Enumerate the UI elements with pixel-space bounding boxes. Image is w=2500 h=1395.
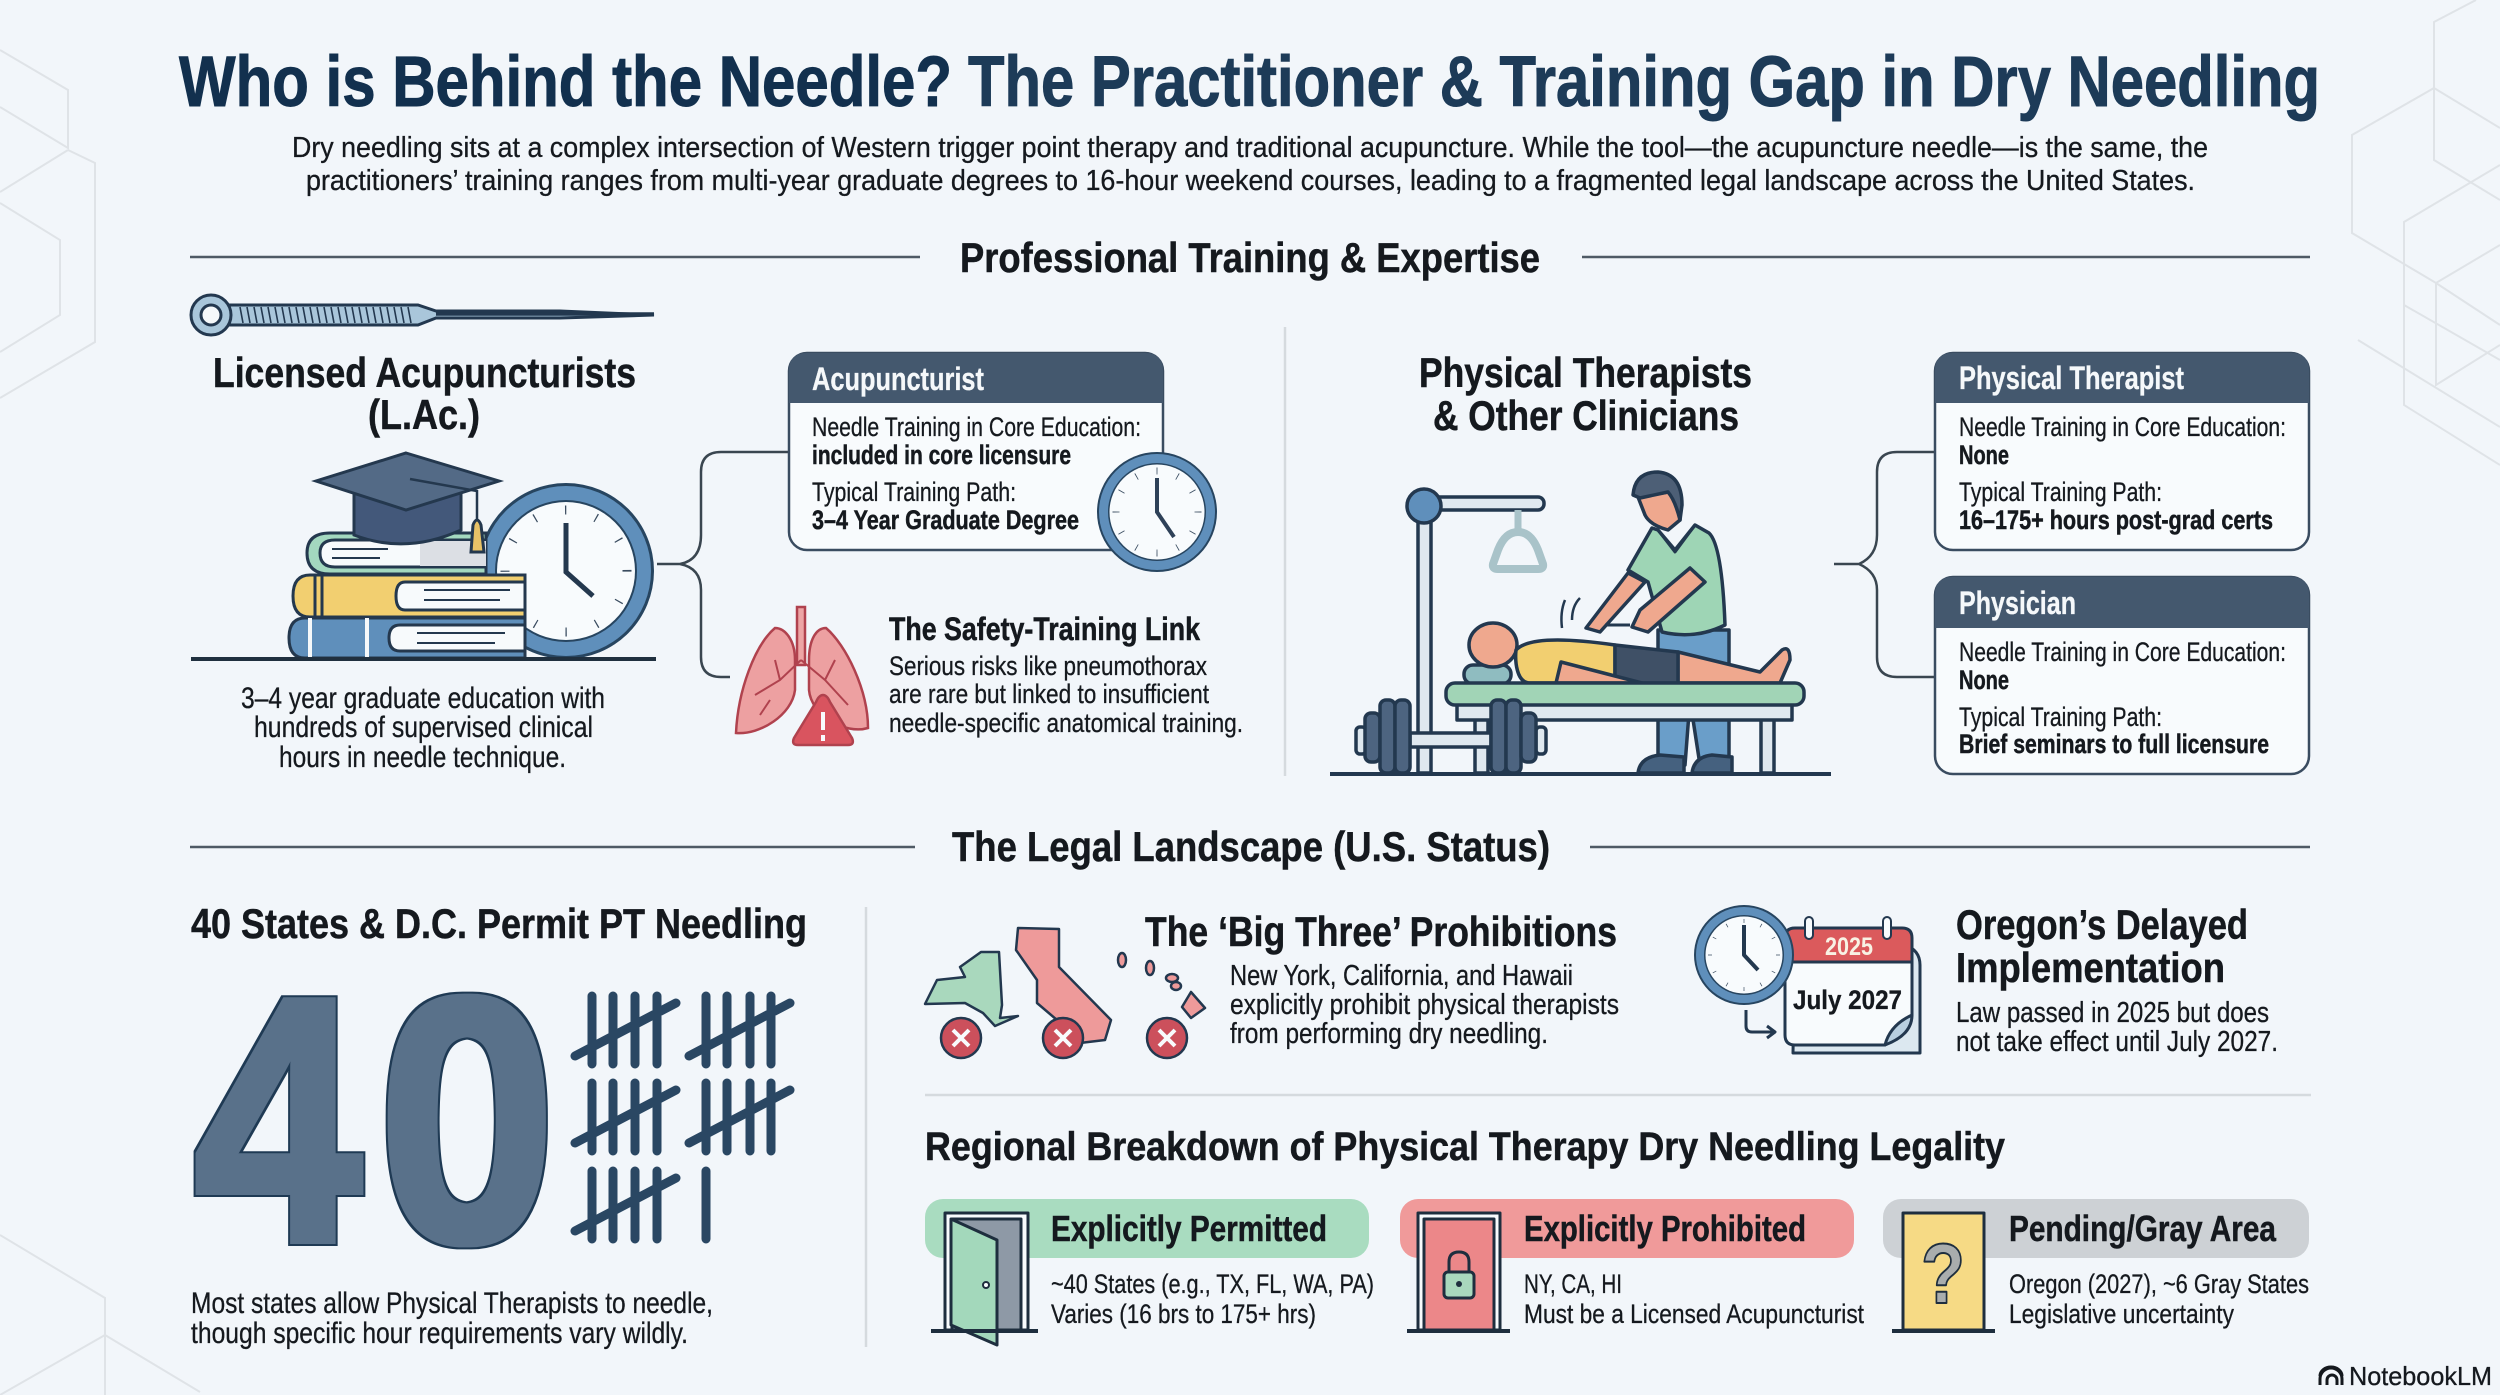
panel: explicitly permitted: Varies (16 brs to 175+ hrs) bbox=[1051, 1299, 1316, 1329]
card: physician: Typical Training Path: bbox=[1959, 702, 2162, 732]
big three text: The ‘Big Three’ Prohibitions bbox=[1145, 908, 1617, 955]
card: acupuncturist: included in core licensure bbox=[812, 440, 1071, 470]
icon: calendar and clock: 2025 bbox=[1825, 933, 1873, 961]
icon: locked door bbox=[1407, 1213, 1510, 1331]
panel: explicitly permitted bbox=[925, 1199, 1374, 1345]
intro text: practitioners’ training ranges from multi-year graduate degrees to 16-hour weekend courses, leading to a fragmented legal landscape across the United States. bbox=[306, 165, 2195, 197]
intro text: Dry needling sits at a complex intersection of Western trigger point therapy and traditional acupuncture. While the tool—the acupuncture needle—is the same, the bbox=[292, 132, 2208, 164]
card: physical therapist: Physical Therapist bbox=[1959, 360, 2184, 396]
card: acupuncturist: 3–4 Year Graduate Degree bbox=[812, 505, 1079, 535]
safety-training text bbox=[889, 611, 1243, 738]
card: physical therapist: 16–175+ hours post-grad certs bbox=[1959, 505, 2273, 535]
card: acupuncturist: Typical Training Path: bbox=[812, 477, 1016, 507]
card: physician: Brief seminars to full licensure bbox=[1959, 729, 2269, 759]
patient bbox=[1464, 623, 1790, 684]
card: physician: Needle Training in Core Education: bbox=[1959, 637, 2286, 667]
card: physical therapist bbox=[1935, 353, 2309, 550]
panel: explicitly permitted: ~40 States (e.g., TX, FL, WA, PA) bbox=[1051, 1269, 1374, 1299]
icon: acupuncture needle bbox=[191, 295, 654, 335]
caption: acupuncturist education: hours in needle technique. bbox=[279, 741, 566, 774]
caption: acupuncturist education: 3–4 year graduate education with bbox=[241, 682, 605, 715]
title: Who is Behind the Needle? bbox=[179, 43, 952, 122]
icon: lungs with warning bbox=[736, 607, 868, 745]
icon: small clock bbox=[1097, 452, 1217, 572]
dumbbell bbox=[1356, 700, 1546, 773]
title bbox=[179, 43, 2320, 122]
panel: explicitly prohibited bbox=[1400, 1199, 1864, 1331]
heading: licensed acupuncturists: Licensed Acupuncturists bbox=[213, 349, 636, 396]
green book bbox=[307, 533, 486, 574]
heading: licensed acupuncturists bbox=[213, 349, 636, 438]
safety-training text: Serious risks like pneumothorax bbox=[889, 651, 1207, 681]
yellow book bbox=[293, 575, 525, 617]
heading: licensed acupuncturists: (L.Ac.) bbox=[368, 391, 480, 438]
connector: acupuncturist branch bbox=[657, 452, 789, 677]
big three text: New York, California, and Hawaii bbox=[1230, 960, 1573, 992]
icon: state maps with prohibition marks bbox=[925, 928, 1205, 1058]
card: physical therapist: Needle Training in Core Education: bbox=[1959, 412, 2286, 442]
big three text bbox=[1145, 908, 1619, 1050]
icon: clock with books and graduation cap bbox=[191, 453, 656, 659]
icon: open door bbox=[931, 1213, 1038, 1345]
heading: physical therapists: Physical Therapists bbox=[1419, 349, 1752, 396]
card: physical therapist: Typical Training Path: bbox=[1959, 477, 2162, 507]
safety-training text: needle-specific anatomical training. bbox=[889, 708, 1243, 738]
caption: most states: Most states allow Physical Therapists to needle, bbox=[191, 1287, 713, 1320]
heading: legal landscape: The Legal Landscape (U.S. Status) bbox=[952, 823, 1550, 870]
big three text: from performing dry needling. bbox=[1230, 1018, 1548, 1050]
heading: physical therapists bbox=[1419, 349, 1752, 439]
caption: acupuncturist education: hundreds of supervised clinical bbox=[254, 711, 593, 744]
pole and handle bbox=[1407, 489, 1544, 773]
big number 40: 4 bbox=[194, 925, 364, 1316]
card: acupuncturist bbox=[789, 353, 1163, 550]
card: acupuncturist: Needle Training in Core Education: bbox=[812, 412, 1141, 442]
icon: calendar and clock bbox=[1694, 905, 1920, 1053]
caption: acupuncturist education bbox=[241, 682, 605, 774]
card: physician: Physician bbox=[1959, 585, 2076, 621]
graduation cap bbox=[316, 453, 499, 552]
therapist bbox=[1561, 472, 1732, 773]
panel: explicitly prohibited: NY, CA, HI bbox=[1524, 1269, 1622, 1299]
heading: 40 states: 40 States & D.C. Permit PT Needling bbox=[191, 900, 807, 947]
card: physician: None bbox=[1959, 665, 2009, 695]
icon: question door bbox=[1892, 1213, 1995, 1331]
tally marks bbox=[575, 996, 790, 1239]
illustration: therapist treating patient bbox=[1330, 472, 1831, 774]
big three text: explicitly prohibit physical therapists bbox=[1230, 989, 1619, 1021]
safety-training text: The Safety-Training Link bbox=[889, 611, 1200, 647]
icon: question door: ? bbox=[1921, 1227, 1965, 1322]
big number 40: 0 bbox=[378, 925, 556, 1316]
heading: professional training: Professional Training & Expertise bbox=[960, 234, 1540, 281]
table bbox=[1446, 683, 1804, 773]
oregon text: Implementation bbox=[1956, 944, 2225, 991]
panel: pending gray area bbox=[1883, 1199, 2309, 1331]
connector: clinician branch bbox=[1834, 452, 1935, 677]
big number 40 bbox=[194, 925, 556, 1316]
heading: physical therapists: & Other Clinicians bbox=[1433, 392, 1739, 439]
panel: explicitly permitted: Explicitly Permitted bbox=[1051, 1208, 1327, 1249]
icon: calendar and clock: July 2027 bbox=[1793, 985, 1902, 1015]
panel: pending gray area: Pending/Gray Area bbox=[2009, 1208, 2277, 1249]
caption: most states bbox=[191, 1287, 713, 1350]
card: physician bbox=[1935, 577, 2309, 774]
oregon text: not take effect until July 2027. bbox=[1956, 1026, 2278, 1058]
oregon text bbox=[1956, 901, 2278, 1058]
panel: pending gray area: Oregon (2027), ~6 Gray States bbox=[2009, 1269, 2309, 1299]
safety-training text: are rare but linked to insufficient bbox=[889, 679, 1209, 709]
oregon text: Oregon’s Delayed bbox=[1956, 901, 2248, 948]
notebooklm badge: NotebookLM bbox=[2349, 1361, 2492, 1391]
panel: explicitly prohibited: Must be a Licensed Acupuncturist bbox=[1524, 1299, 1864, 1329]
heading: regional breakdown: Regional Breakdown of Physical Therapy Dry Needling Legality bbox=[925, 1125, 2006, 1169]
caption: most states: though specific hour requirements vary wildly. bbox=[191, 1317, 688, 1350]
card: physical therapist: None bbox=[1959, 440, 2009, 470]
panel: explicitly prohibited: Explicitly Prohibited bbox=[1524, 1208, 1806, 1249]
panel: pending gray area: Legislative uncertainty bbox=[2009, 1299, 2234, 1329]
card: acupuncturist: Acupuncturist bbox=[812, 361, 984, 397]
intro text bbox=[292, 132, 2208, 197]
oregon text: Law passed in 2025 but does bbox=[1956, 997, 2269, 1029]
blue book bbox=[289, 618, 525, 658]
